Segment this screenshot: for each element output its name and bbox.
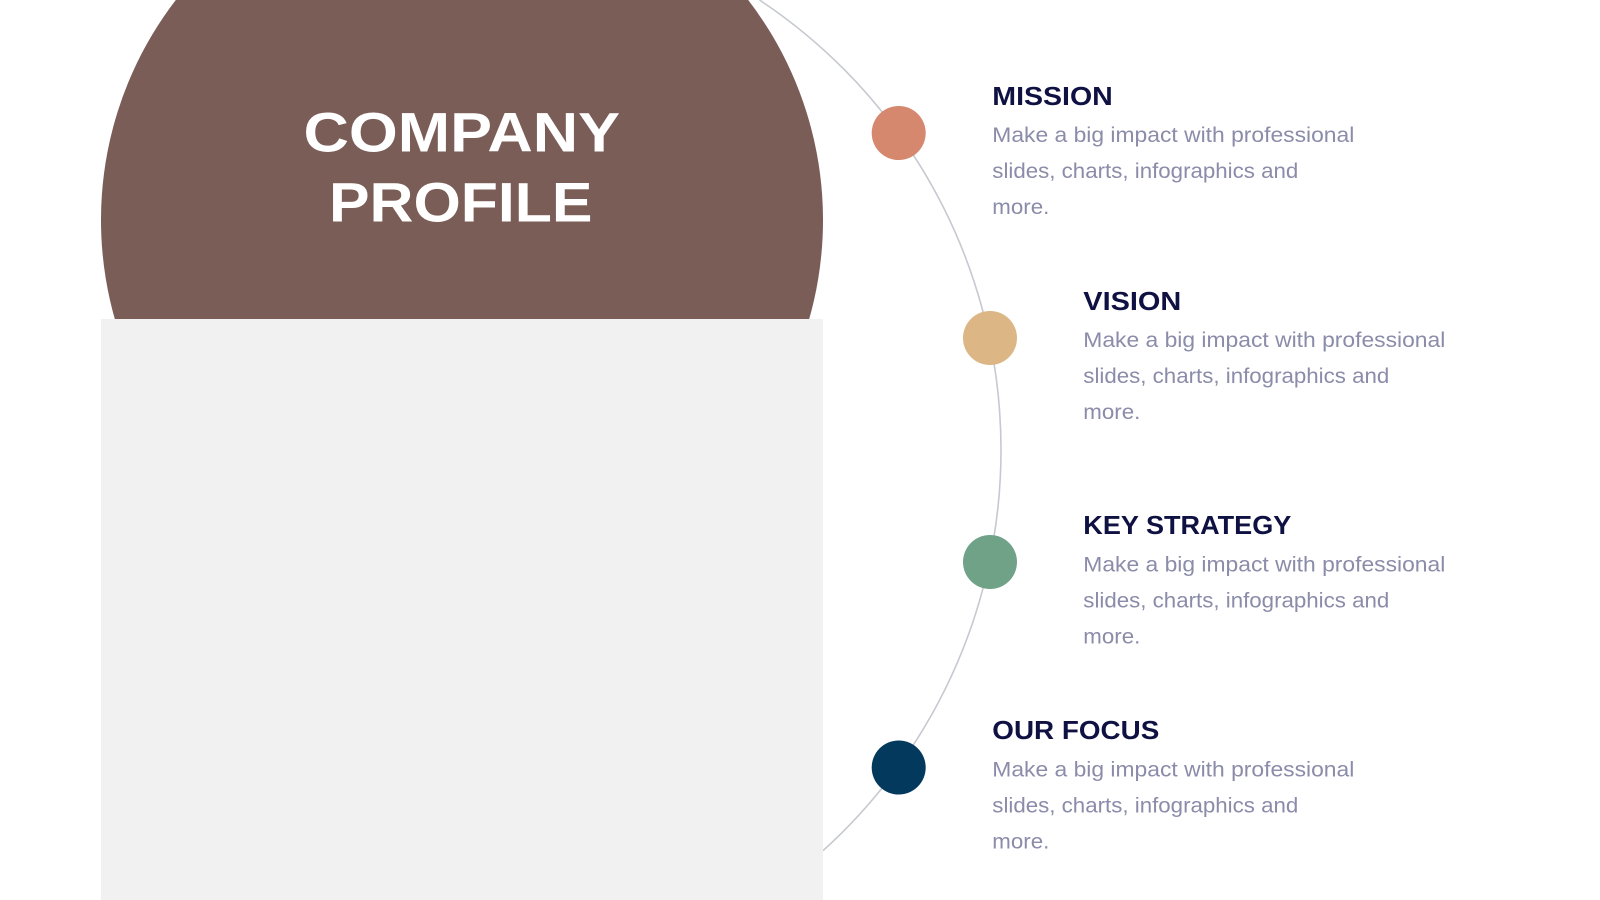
dot: mission: [872, 106, 926, 160]
text: key strategy description: [1083, 552, 1445, 648]
block: vision: [1083, 286, 1445, 424]
timeline arc: [760, 0, 1001, 851]
block: key strategy: [1083, 510, 1445, 648]
dot: vision: [963, 311, 1017, 365]
title: PROFILE: [329, 170, 592, 234]
text: our focus description: slides, charts, infographics and: [992, 794, 1298, 818]
dot: our focus: [872, 740, 926, 794]
block: our focus: [992, 715, 1354, 854]
text: key strategy description: more.: [1083, 624, 1140, 648]
heading: vision: VISION: [1083, 286, 1181, 316]
brown circle header: [101, 0, 823, 320]
text: vision description: slides, charts, infographics and: [1083, 364, 1389, 388]
text: our focus description: more.: [992, 830, 1049, 854]
image placeholder panel: [101, 319, 823, 900]
dot: key strategy: [963, 535, 1017, 589]
heading: our focus: OUR FOCUS: [992, 715, 1159, 745]
text: mission description: slides, charts, infographics and: [992, 159, 1298, 183]
heading: key strategy: KEY STRATEGY: [1083, 510, 1291, 540]
text: key strategy description: slides, charts, infographics and: [1083, 588, 1389, 612]
title: [304, 100, 620, 234]
text: mission description: [992, 123, 1354, 219]
block: mission: [992, 81, 1354, 219]
text: our focus description: [992, 758, 1354, 854]
text: vision description: more.: [1083, 400, 1140, 424]
text: our focus description: Make a big impact with professional: [992, 758, 1354, 782]
text: key strategy description: Make a big impact with professional: [1083, 552, 1445, 576]
text: vision description: Make a big impact with professional: [1083, 328, 1445, 352]
text: mission description: more.: [992, 195, 1049, 219]
text: vision description: [1083, 328, 1445, 424]
text: mission description: Make a big impact with professional: [992, 123, 1354, 147]
title: COMPANY: [304, 100, 620, 164]
heading: mission: MISSION: [992, 81, 1113, 111]
